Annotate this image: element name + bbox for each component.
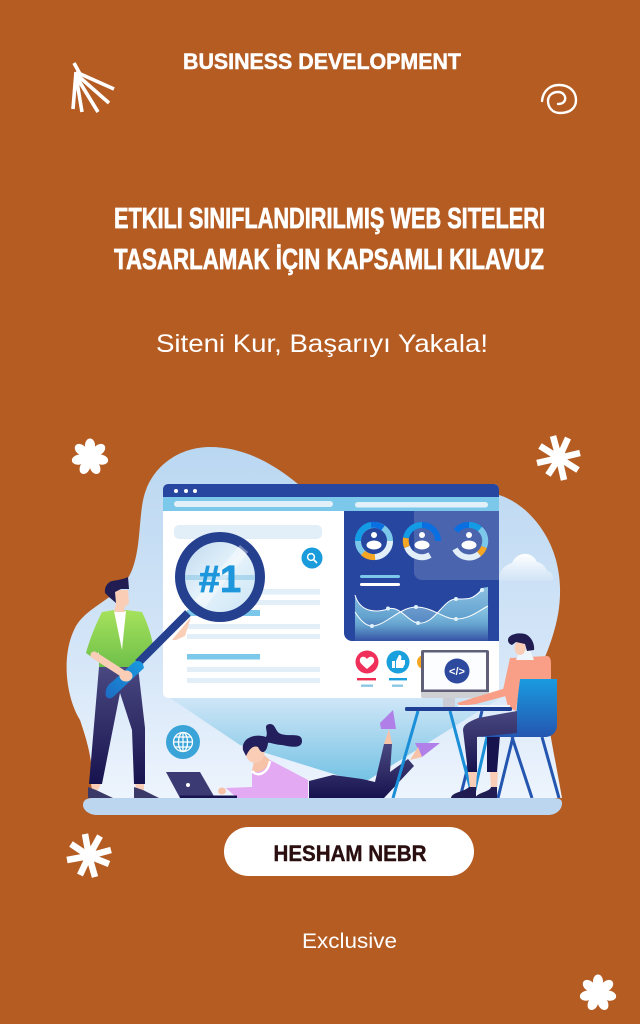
magnifier: #1 [199,559,241,601]
sweater [86,610,153,667]
donut charts [358,525,485,557]
sweater [226,760,308,798]
woman's feet [380,710,440,760]
illustration [67,447,562,815]
title [114,203,545,276]
chair legs [473,737,559,798]
shirt [114,611,126,650]
torso [503,656,551,711]
legend lines [360,575,400,578]
content lines [187,589,320,683]
desk legs [393,711,482,798]
area chart [355,587,488,641]
magnifier [106,537,260,698]
hair [243,724,302,756]
subtitle: Siteni Kur, Başarıyı Yakala! [156,330,488,358]
cloud [499,554,553,581]
monitor [421,650,489,707]
reaction: heart [356,650,378,687]
author button [224,827,474,876]
ankles [91,784,144,790]
pants [89,667,145,784]
hand [218,788,226,794]
thigh [463,711,517,772]
face [114,590,129,612]
blue blob [67,447,562,798]
ankles [468,772,498,788]
arm [94,655,122,673]
back leg [487,735,500,772]
hand behind handle [172,617,191,640]
shoes [88,787,159,798]
hair [105,577,129,603]
icon: globe [166,725,200,759]
reaction: thumbs up [386,650,410,687]
arm and keyboard [457,688,510,706]
desk scene [393,633,559,798]
collar and face [252,755,270,772]
icon: search button [302,548,322,568]
icon: flower top left [71,438,109,476]
desk top [405,707,512,711]
author button: HESHAM NEBR [274,841,427,866]
exclusive label: Exclusive [302,930,397,953]
search bar [174,525,322,539]
icon: spiral [542,85,576,113]
neck and face [516,650,534,660]
shoes [451,787,497,798]
heading: business development: BUSINESS DEVELOPMENT [183,49,462,74]
monitor: </> [449,666,465,678]
floor [83,798,562,815]
icon: flower bottom right [579,974,617,1012]
icon: radial lines [73,63,114,112]
icon: asterisk right [537,436,580,480]
sky wedge under window [170,698,500,782]
hand on handle [120,670,132,682]
chair [478,679,557,737]
woman lying with laptop [166,710,440,798]
hair [508,633,534,651]
laptop [166,772,237,798]
woman's legs [309,744,414,798]
icon: asterisk lower left [67,834,111,877]
browser window [163,484,499,698]
dashboard panel [344,511,499,641]
reaction: orange badge [417,655,431,669]
man with magnifier [86,537,260,798]
